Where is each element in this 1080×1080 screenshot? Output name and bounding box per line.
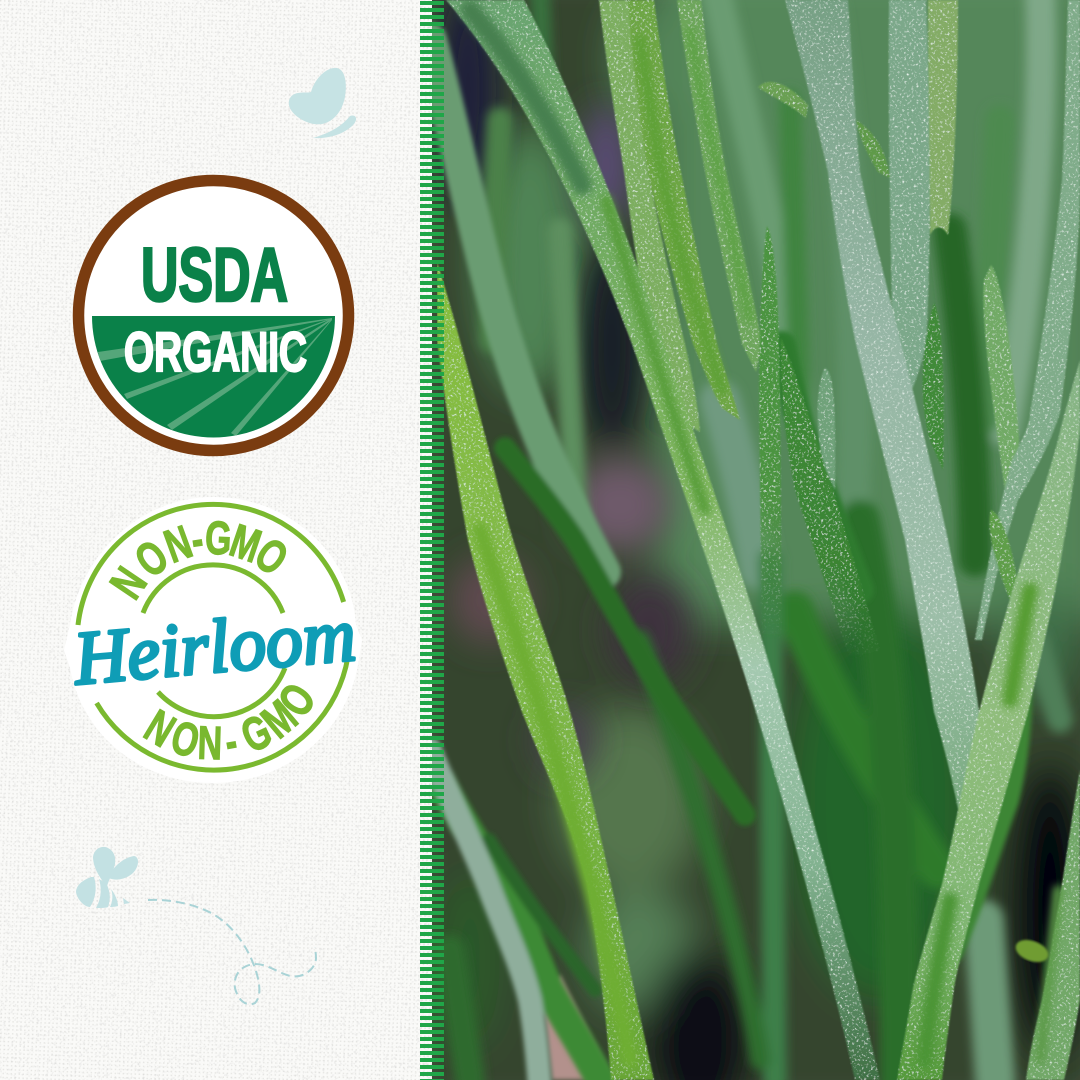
blade: tip far right (983, 265, 1019, 490)
blade: dark tip center (781, 338, 880, 660)
blade: thin pale right (975, 0, 1080, 640)
photo: sharp foreground blades (437, 0, 1080, 1080)
text: NON-GMO top: O (246, 527, 297, 586)
blade: left twin stem (599, 0, 700, 432)
blade: pale small tip (818, 368, 835, 490)
text: NON-GMO bottom: N (197, 716, 223, 770)
blade: upper pale stem (889, 0, 930, 400)
blade: bud left (758, 82, 808, 118)
blade: right twin stem (628, 0, 740, 420)
text: NON-GMO top: M (224, 514, 267, 573)
blade: yellow-green stem (928, 0, 958, 235)
text: NON-GMO bottom (136, 674, 326, 770)
photo: out-of-focus blades (450, 0, 1060, 1080)
text: NON-GMO bottom: O (166, 710, 205, 768)
text: NON-GMO bottom: O (268, 674, 326, 726)
photo: blurred background (400, 0, 1080, 1080)
text: ORGANIC: ORGANIC (124, 320, 307, 383)
photo: pink background sliver (544, 974, 596, 1080)
badge rings (78, 504, 348, 770)
text: NON-GMO top: O (125, 529, 178, 587)
text: Heirloom script: Heirloom (70, 593, 359, 701)
icon: dashed bee flight path (148, 900, 316, 1004)
panel: fabric background (0, 0, 432, 1080)
blade: tip lower right (989, 510, 1018, 600)
text: NON-GMO top (100, 511, 297, 608)
blade: pale long stem (785, 0, 985, 830)
blade: far right bottom stem (1026, 770, 1080, 1080)
blade: dark tip right (923, 303, 944, 470)
text: NON-GMO top: - (187, 512, 207, 566)
icon: bee (76, 847, 138, 908)
photo: mid-focus blades (430, 40, 1018, 1080)
icon: butterfly (289, 68, 356, 138)
panel: chive photo (400, 0, 1080, 1080)
badge: USDA Organic (78, 180, 348, 450)
text: NON-GMO top: N (100, 558, 157, 608)
text: USDA: USDA (141, 233, 288, 318)
photo: dark and purple background patches (440, 0, 694, 774)
blade: slim upper stem (677, 0, 762, 372)
blade: bright left stem (437, 262, 654, 1080)
badge field with rays (92, 316, 335, 438)
blade: right foreground stem (897, 360, 1080, 1080)
striped green divider (420, 0, 444, 1080)
text: NON-GMO bottom: G (233, 704, 279, 763)
photo: blade inner colour streaks (470, 10, 1058, 1060)
badge: Non-GMO Heirloom (64, 497, 362, 783)
blade: narrow tip center (759, 226, 782, 640)
text: NON-GMO bottom: - (221, 714, 241, 768)
text: NON-GMO top: N (158, 515, 199, 573)
blade: bud right (856, 120, 890, 178)
badge ring (78, 180, 348, 450)
blade: main diagonal stem (446, 0, 880, 1080)
photo: small bud (1014, 938, 1049, 964)
text: NON-GMO top: G (204, 511, 233, 565)
badge white backing (64, 497, 362, 783)
text: NON-GMO bottom: N (136, 699, 184, 757)
text: NON-GMO bottom: M (251, 690, 307, 748)
